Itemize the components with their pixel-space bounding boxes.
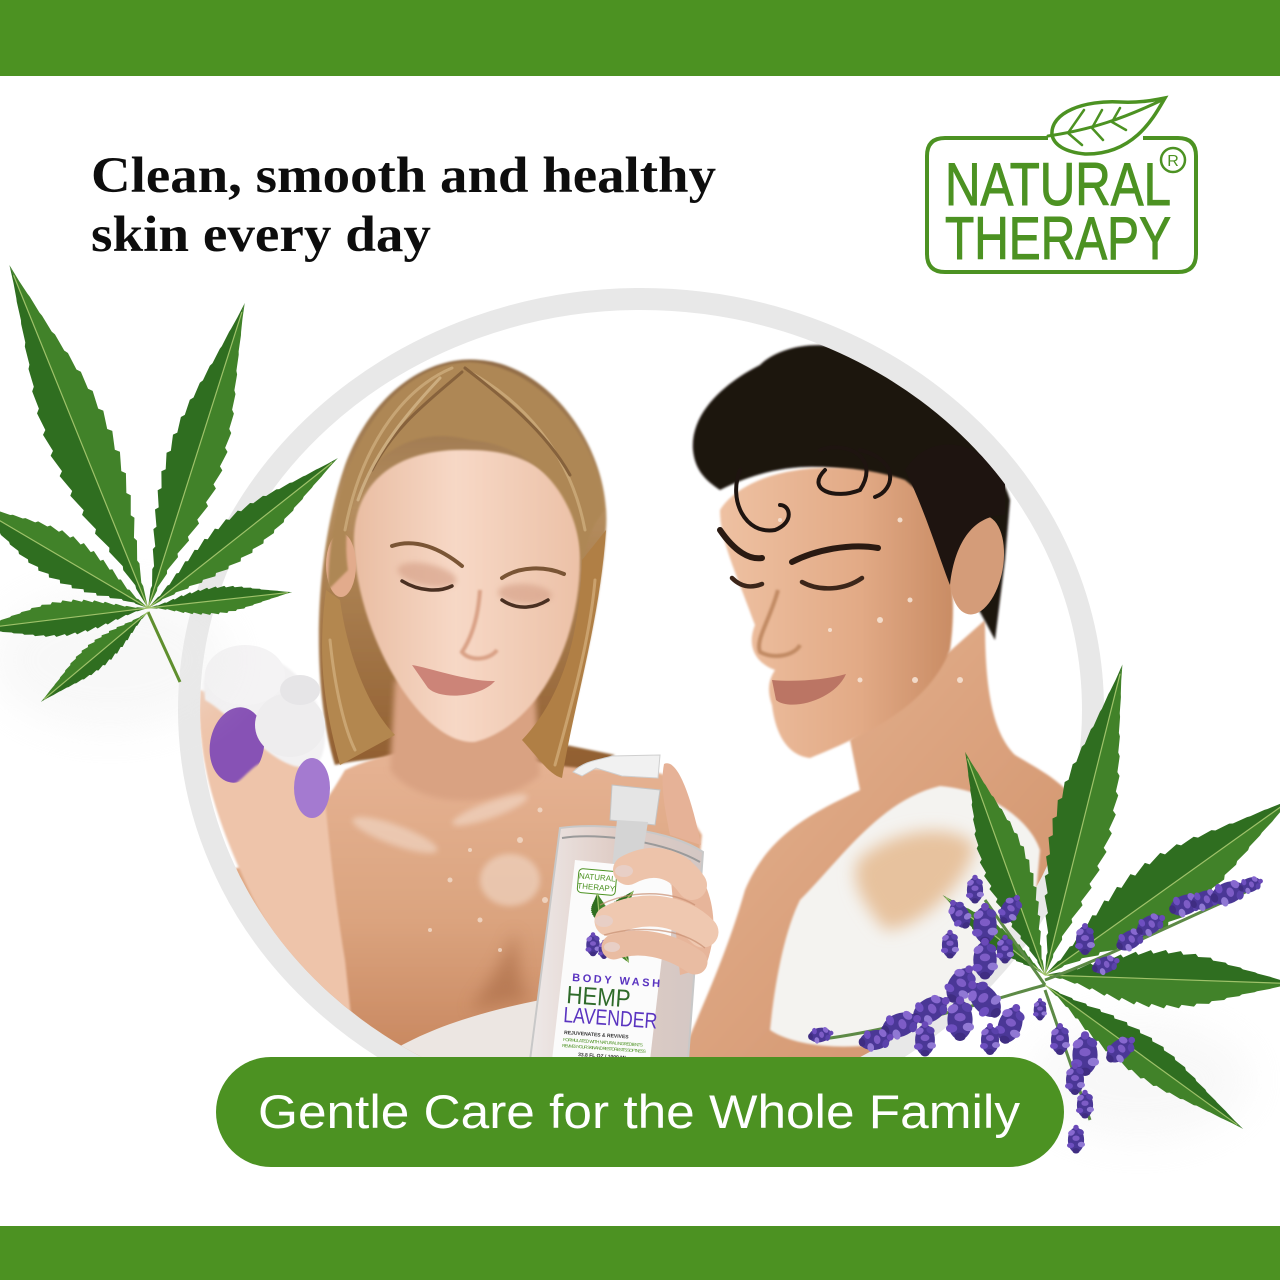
- label text: REVIVES YOUR SKIN AND RESTORES ITS SOFTNESS: [562, 1043, 646, 1054]
- logo wordmark: NATURAL: [945, 151, 1171, 218]
- lavender bunch: [807, 873, 1266, 1154]
- man side hair: [912, 454, 1005, 585]
- pump collar: [610, 785, 660, 825]
- cleavage shadow: [475, 940, 528, 1010]
- woman hair highlights: [330, 368, 595, 765]
- logo leaf: [1048, 98, 1165, 154]
- logo wordmark: THERAPY: [945, 205, 1171, 272]
- chest droplets: [428, 808, 548, 952]
- inner white cylinder: [615, 880, 676, 945]
- woman fringe: [328, 362, 604, 590]
- woman fingers on sponge: [204, 692, 260, 784]
- woman nose shade: [462, 590, 497, 659]
- woman: [199, 359, 702, 1060]
- man hair: [693, 345, 1010, 640]
- skin patch in foam: [855, 831, 975, 930]
- man face: [720, 468, 953, 758]
- bottom green band: [0, 1226, 1280, 1280]
- heading: skin every day: [91, 207, 431, 263]
- man eyes: [732, 578, 862, 588]
- heading: [91, 148, 716, 263]
- man mouth: [772, 674, 846, 705]
- man: [680, 345, 1075, 1060]
- man droplets: [778, 518, 963, 683]
- woman arm and hand: [199, 690, 352, 1025]
- foam on shoulder: [770, 786, 1040, 1047]
- hemp leaf: left: [0, 252, 351, 730]
- woman lips: [412, 665, 495, 696]
- label text: 33.8 FL OZ / 1000 ML: [578, 1052, 628, 1061]
- registered mark: [1161, 148, 1185, 172]
- heading: Clean, smooth and healthy: [91, 148, 716, 204]
- woman face: [354, 450, 580, 742]
- woman neck: [390, 680, 540, 801]
- logo wordmark: [945, 151, 1171, 272]
- woman eyebrows: [392, 543, 564, 578]
- man neck and shoulder: [680, 620, 1075, 1060]
- woman ear: [326, 533, 356, 597]
- woman eye shadows: [395, 558, 553, 606]
- woman side strands: [522, 530, 606, 778]
- label botanical: [586, 885, 640, 967]
- hemp leaf: right: [936, 657, 1280, 1145]
- label text: [562, 972, 660, 1061]
- bottle body: [530, 826, 703, 1060]
- label text: HEMP: [566, 981, 631, 1013]
- label text: REJUVENATES & REVIVES: [564, 1030, 629, 1041]
- man curls: [734, 468, 892, 532]
- oval ring frame: [189, 299, 1093, 1121]
- pump bottle: [530, 755, 713, 1061]
- man nose shade: [759, 590, 800, 656]
- registered mark: R: [1167, 153, 1179, 170]
- label text: LAVENDER: [563, 1002, 658, 1034]
- bottle label: [552, 860, 672, 1060]
- bottle shoulder line: [562, 836, 700, 862]
- pill banner: Gentle Care for the Whole Family: [216, 1057, 1064, 1167]
- woman eyes: [402, 581, 548, 607]
- label text: BODY WASH: [572, 972, 660, 990]
- label logo: NATURAL: [579, 871, 616, 884]
- label text: FORMULATED WITH NATURAL INGREDIENTS: [563, 1037, 643, 1048]
- pump tube: [612, 820, 648, 870]
- label logo: THERAPY: [577, 881, 616, 894]
- man eyebrows: [720, 530, 878, 562]
- woman hair back: [319, 359, 615, 782]
- pill banner: Gentle Care for the Whole Family: Gentle Care for the Whole Family: [258, 1085, 1021, 1138]
- pump head: [573, 755, 660, 778]
- man ear: [950, 517, 1004, 614]
- sponge: [204, 645, 330, 818]
- label logo: [577, 868, 617, 896]
- hand on bottle: [595, 763, 713, 975]
- logo: Natural Therapy: [927, 98, 1196, 272]
- towel: [401, 1000, 537, 1057]
- people photo: [199, 345, 1075, 1061]
- top green band: [0, 0, 1280, 76]
- soap sheen on chest: [349, 789, 540, 906]
- woman shoulders and chest: [228, 748, 702, 1057]
